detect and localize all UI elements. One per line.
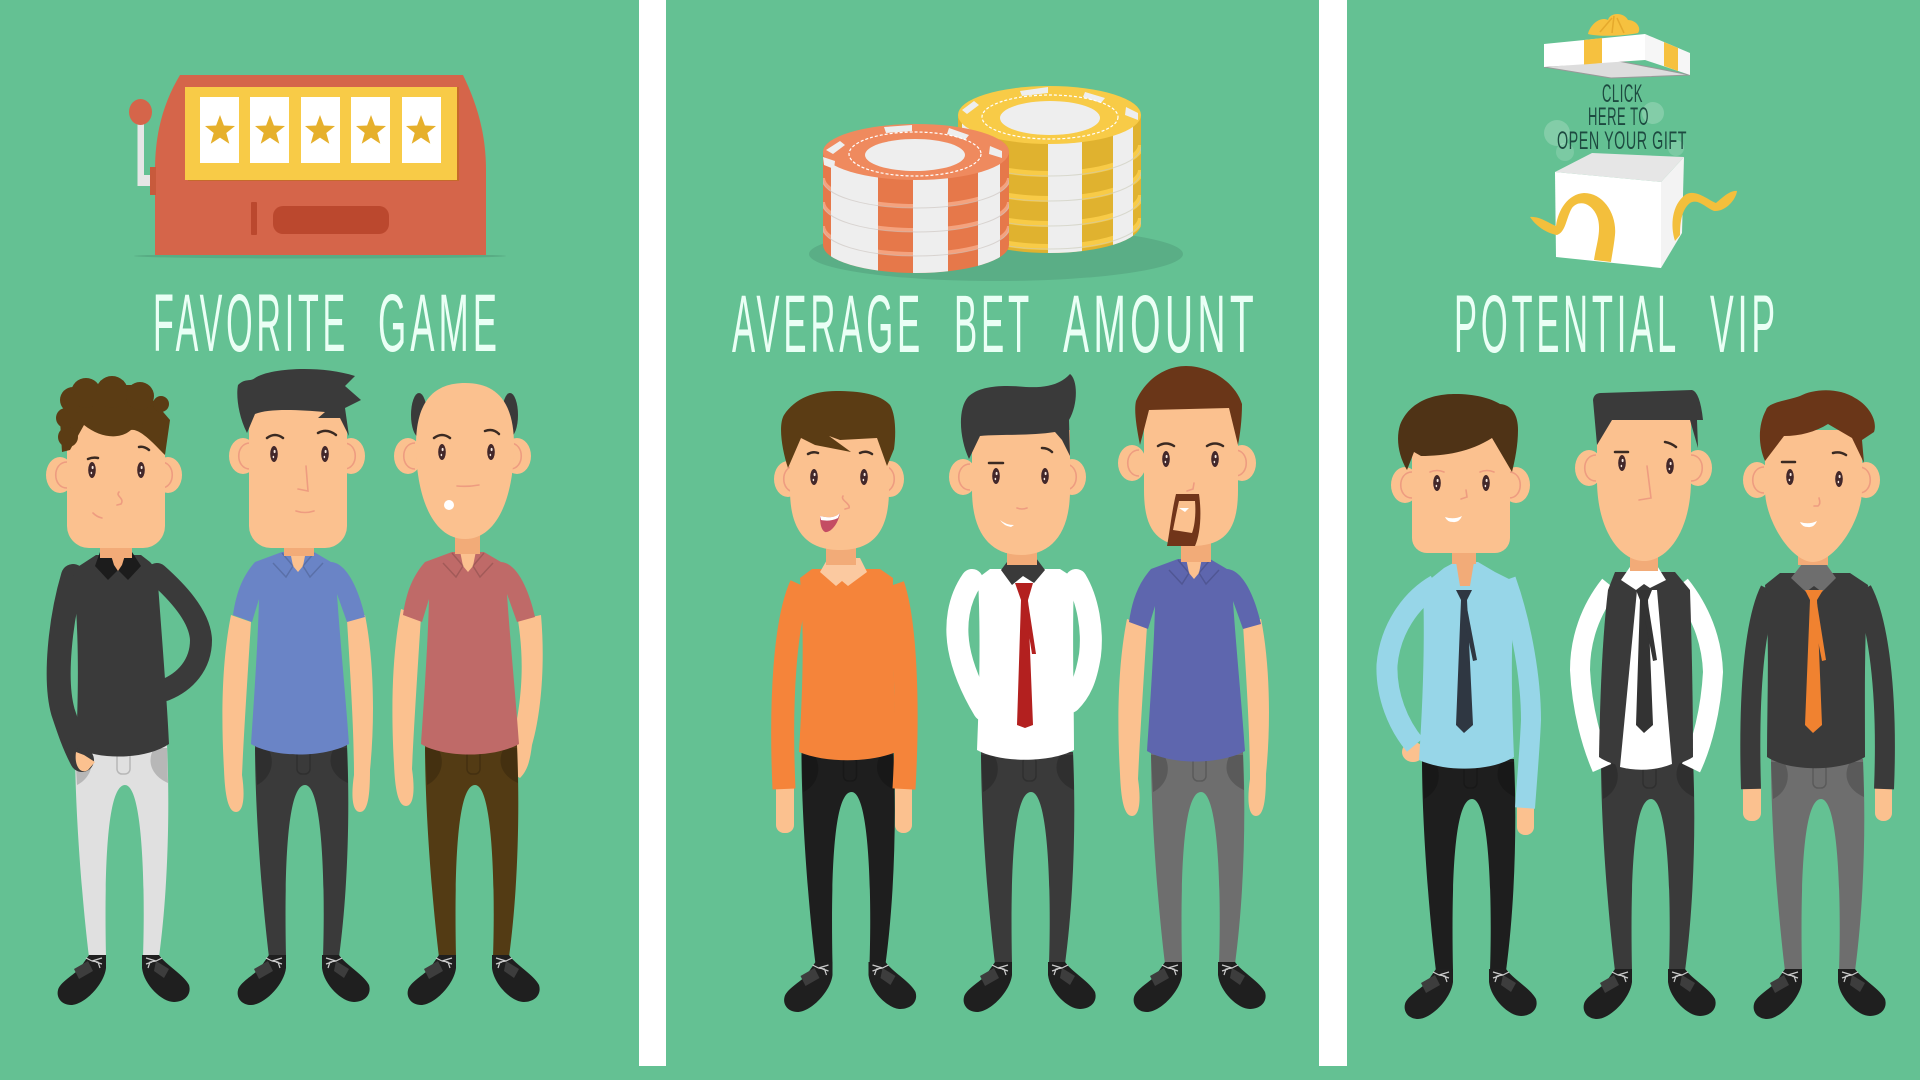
sweater [783,558,906,789]
panel: favorite game [46,75,543,1005]
person: flat hair, black vest, white shirt [1575,390,1716,1019]
heading: favorite game: FAVORITE [153,278,349,369]
head [1118,366,1256,562]
shirt [1129,558,1261,762]
person: brown hair, light blue shirt [1387,394,1537,1019]
person: curly hair, black sweater [46,376,201,1005]
head [949,374,1086,565]
head [394,383,531,554]
shirt and vest [1580,564,1713,770]
gift caption: HERE TO [1588,103,1649,131]
shirt [403,551,535,754]
gift caption: CLICK [1602,80,1643,108]
shirt [233,551,365,754]
trousers and shoes [238,745,370,1005]
arms [1118,619,1269,816]
panel: average bet amount [732,86,1269,1012]
person: wavy hair, dark sweater, orange tie [1743,390,1892,1019]
trousers and shoes [1754,759,1886,1019]
trousers and shoes [784,752,916,1012]
panel: average bet amount: AMOUNT [1063,279,1258,370]
white shirt [957,558,1091,760]
sweater and tie [1750,564,1885,789]
trousers and shoes [408,745,540,1005]
trousers and shoes [58,745,190,1005]
arms [392,609,543,806]
shirt and hand [1387,562,1534,835]
heading: average bet amount: BET [954,279,1033,370]
divider: left white bar [639,0,666,1066]
head [1743,390,1880,565]
trousers and shoes [1584,759,1716,1019]
heading: potential vip [1454,279,1779,370]
box [1555,153,1684,268]
panel: favorite game: GAME [378,278,501,369]
trousers and shoes [1405,759,1537,1019]
person: quiff hair, white shirt, red tie [949,374,1096,1012]
gift caption [1557,80,1687,155]
arms [222,615,373,812]
icon: slot machine [129,75,506,258]
yellow chip stack [958,86,1141,253]
person: brown hair, orange sweater [774,391,916,1012]
head [46,376,182,558]
hands [776,780,912,833]
panel: potential vip: VIP [1710,279,1779,370]
icon: open gift box [1530,14,1737,268]
heading: average bet amount: AVERAGE [732,279,924,370]
panel: potential vip [1387,14,1892,1019]
icon: poker chip stacks [809,86,1183,281]
sweater [59,552,201,771]
person: bald, red shirt [392,383,543,1005]
lid [1544,34,1690,78]
head [1391,394,1530,564]
bow [1588,14,1639,36]
head [1575,390,1712,571]
trousers and shoes [964,752,1096,1012]
gift caption: OPEN YOUR GIFT [1557,127,1687,155]
head [229,369,365,556]
divider: right white bar [1319,0,1347,1066]
person: black hair, blue shirt [222,369,373,1005]
ribbons [1530,191,1737,262]
hands [1743,780,1892,821]
orange chip stack [823,124,1009,273]
trousers and shoes [1134,752,1266,1012]
person: goatee, purple shirt [1118,366,1269,1012]
head [774,391,904,565]
